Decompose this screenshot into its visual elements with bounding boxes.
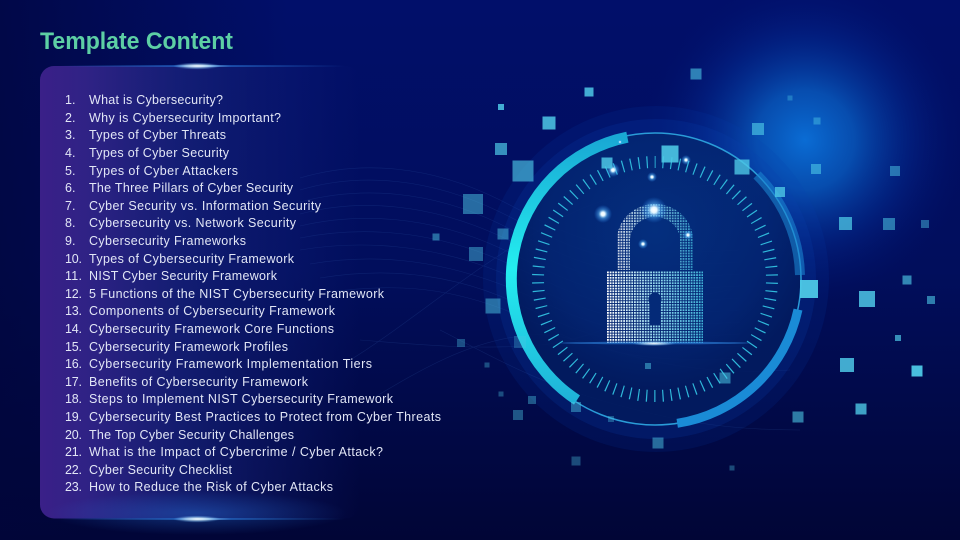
table of contents list: What is Cybersecurity? <box>89 93 223 107</box>
table of contents list: 11. <box>65 269 82 283</box>
table of contents list: Cybersecurity Best Practices to Protect from Cyber Threats <box>89 410 441 424</box>
tick marks <box>538 162 772 396</box>
table of contents list: What is the Impact of Cybercrime / Cyber Attack? <box>89 445 383 459</box>
background wave lines <box>300 168 800 430</box>
table of contents list: 20. <box>65 428 82 442</box>
floor glow under padlock <box>560 341 750 346</box>
table of contents list: Benefits of Cybersecurity Framework <box>89 375 309 389</box>
table of contents list: Types of Cyber Attackers <box>89 164 238 178</box>
title: Template Content <box>40 28 233 55</box>
table of contents list: NIST Cyber Security Framework <box>89 269 278 283</box>
table of contents list: 6. <box>65 181 75 195</box>
table of contents list: The Top Cyber Security Challenges <box>89 428 294 442</box>
keyhole <box>648 293 662 325</box>
table of contents list: Why is Cybersecurity Important? <box>89 111 281 125</box>
table of contents list: 5. <box>65 164 75 178</box>
table of contents list: The Three Pillars of Cyber Security <box>89 181 294 195</box>
table of contents list: 14. <box>65 322 82 336</box>
table of contents list: 3. <box>65 128 75 142</box>
table of contents list: Types of Cyber Threats <box>89 128 226 142</box>
table of contents list: Cyber Security vs. Information Security <box>89 199 322 213</box>
table of contents list: 18. <box>65 392 82 406</box>
table of contents list: 21. <box>65 445 82 459</box>
table of contents list: 15. <box>65 340 82 354</box>
table of contents list: 2. <box>65 111 75 125</box>
table of contents list: 16. <box>65 357 82 371</box>
table of contents list: Cybersecurity Frameworks <box>89 234 246 248</box>
table of contents list: Cyber Security Checklist <box>89 463 233 477</box>
cyan thick arc <box>511 137 627 400</box>
table of contents list: 10. <box>65 252 82 266</box>
sparkles <box>594 140 693 249</box>
faint upper right arc <box>757 175 800 275</box>
table of contents list: 9. <box>65 234 75 248</box>
blue thick arc <box>677 310 798 423</box>
table of contents list: 4. <box>65 146 75 160</box>
padlock body <box>607 271 703 343</box>
table of contents list: Cybersecurity vs. Network Security <box>89 216 297 230</box>
table of contents list: Cybersecurity Framework Core Functions <box>89 322 334 336</box>
table of contents list <box>65 93 441 494</box>
table of contents list: 8. <box>65 216 75 230</box>
table of contents list: 5 Functions of the NIST Cybersecurity Framework <box>89 287 385 301</box>
table of contents list: 22. <box>65 463 82 477</box>
contents panel <box>40 66 360 518</box>
dial outer halo rings <box>483 106 829 452</box>
padlock <box>607 204 703 343</box>
table of contents list: Steps to Implement NIST Cybersecurity Framework <box>89 392 394 406</box>
table of contents list: Types of Cyber Security <box>89 146 230 160</box>
bottom light streak <box>47 491 347 535</box>
table of contents list: Components of Cybersecurity Framework <box>89 304 336 318</box>
table of contents list: Cybersecurity Framework Implementation Tiers <box>89 357 372 371</box>
floating data squares <box>432 68 935 470</box>
table of contents list: How to Reduce the Risk of Cyber Attacks <box>89 480 333 494</box>
table of contents list: 1. <box>65 93 75 107</box>
thin ring <box>509 133 801 425</box>
table of contents list: 17. <box>65 375 82 389</box>
table of contents list: 19. <box>65 410 82 424</box>
padlock shackle <box>617 204 693 270</box>
table of contents list: Types of Cybersecurity Framework <box>89 252 295 266</box>
table of contents list: 23. <box>65 480 82 494</box>
top light streak <box>60 62 345 70</box>
table of contents list: 7. <box>65 199 75 213</box>
table of contents list: Cybersecurity Framework Profiles <box>89 340 288 354</box>
table of contents list: 12. <box>65 287 82 301</box>
table of contents list: 13. <box>65 304 82 318</box>
security dial <box>483 106 829 452</box>
